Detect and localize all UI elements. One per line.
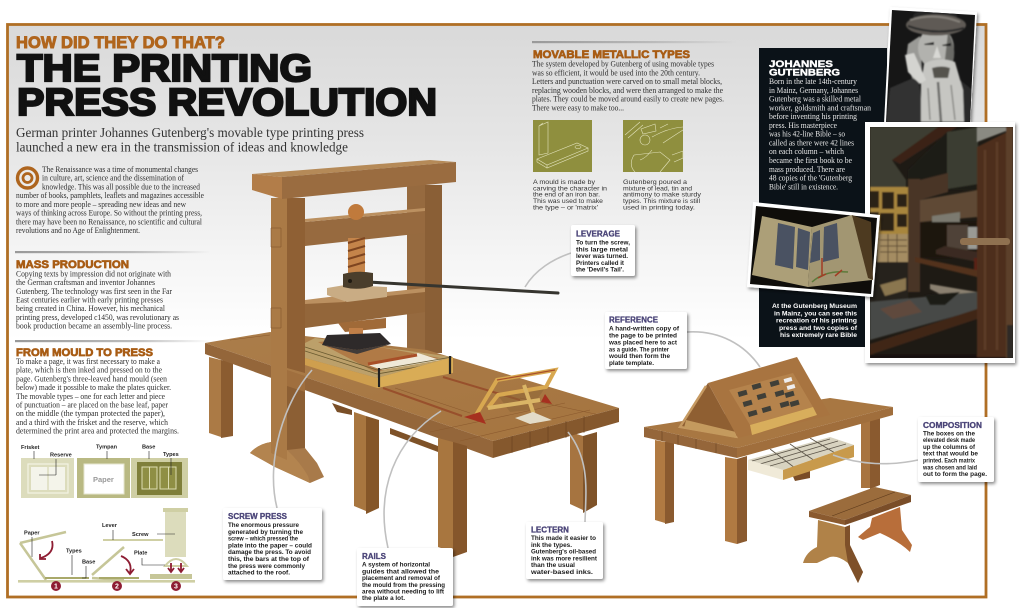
illustration: compositor desk xyxy=(644,357,912,583)
callout: composition: COMPOSITION xyxy=(923,420,982,430)
text: movable metallic types: was so efficient, it would be used into the 20th century. xyxy=(532,68,700,77)
diagram: press steps: 1 xyxy=(54,584,58,590)
intro text block xyxy=(16,165,204,235)
photo: museum recreation of press xyxy=(865,122,1015,363)
labels: mould diagram: Frisket xyxy=(21,445,39,451)
intro text block: number of books, pamphlets, leaflets and magazines accessible xyxy=(16,191,204,200)
text: mass production: Copying texts by impression did not originate with xyxy=(16,269,172,278)
bench xyxy=(803,487,912,583)
callout: leverage: To turn the screw, xyxy=(576,240,630,247)
callout: lectern: This made it easier to xyxy=(531,535,596,542)
diagram: press steps xyxy=(18,508,195,591)
desk legs xyxy=(655,418,880,524)
text: biography: press. His masterpiece xyxy=(769,121,837,130)
text: movable metallic types xyxy=(532,60,724,112)
captions: mould and pour: antimony to make sturdy xyxy=(623,192,702,199)
front left post with foot xyxy=(250,198,324,483)
diagram: press steps: 3 xyxy=(174,584,178,590)
callout: reference: plate template. xyxy=(609,360,654,367)
kicker heading: HOW DID THEY DO THAT? xyxy=(16,34,225,52)
callout: composition: elevated desk made xyxy=(923,437,975,444)
callout: screw press: this, the bars at the top of xyxy=(228,556,310,563)
diagram: three-leaved hand mould xyxy=(21,451,188,498)
text: biography: on each column – which xyxy=(769,147,845,156)
captions: mould and pour: used in printing today. xyxy=(623,204,695,211)
text: biography xyxy=(769,77,872,191)
text: from mould to press: The movable types – one for each letter and piece xyxy=(16,392,165,401)
callout: screw press: The enormous pressure xyxy=(228,522,299,529)
callout: screw press: damage the press. To avoid xyxy=(228,549,311,556)
title: THE PRINTING xyxy=(17,48,312,90)
text: biography: mass produced. There are xyxy=(769,165,845,174)
title xyxy=(17,48,437,124)
back right post xyxy=(407,185,442,353)
heading: Johannes Gutenberg xyxy=(769,59,840,78)
text: mass production xyxy=(16,269,179,331)
callout: rails: the plate a lot. xyxy=(362,595,405,602)
labels: mould diagram: Reserve xyxy=(50,452,72,458)
text: biography: Born in the late 14th-century xyxy=(769,77,858,86)
callout: composition: The boxes on the xyxy=(923,430,975,437)
heading: Johannes Gutenberg: GUTENBERG xyxy=(769,68,840,78)
caption: museum: his extremely rare Bible xyxy=(780,332,858,339)
elevated slanted desk xyxy=(678,357,830,438)
callout: screw press: the press were commonly xyxy=(228,563,305,570)
caption: museum: press and two copies of xyxy=(779,325,858,332)
text: movable metallic types: plates. They could be moved around easily to create new pages. xyxy=(532,95,724,104)
text: biography: called as there were 42 lines xyxy=(769,138,854,148)
mould on table xyxy=(305,338,453,388)
intro text block: there may have been no Renaissance, no scientific and cultural xyxy=(16,217,203,226)
caption: museum xyxy=(772,303,858,339)
labels: mould diagram: Tympan xyxy=(96,444,118,450)
text: mass production: being created in China. However, his mechanical xyxy=(16,304,166,313)
intro text block: in culture, art, science and the dissemination of xyxy=(42,174,184,183)
text: from mould to press: page. Gutenberg's three-leaved hand mould (seen xyxy=(16,374,168,383)
captions: mould and pour: Gutenberg poured a xyxy=(623,179,687,186)
text: movable metallic types: The system developed by Gutenberg of using movable types xyxy=(532,60,714,69)
text: from mould to press: on the middle (the tympan protected the paper), xyxy=(16,409,165,418)
labels: mould diagram xyxy=(21,444,179,458)
captions: mould and pour: mixture of lead, tin and xyxy=(623,185,692,192)
leader lines xyxy=(273,253,918,548)
text: biography: in Mainz, Germany, Johannes xyxy=(769,86,858,95)
callout: composition xyxy=(918,417,994,482)
photo: open Gutenberg Bible xyxy=(747,202,880,297)
labels: press steps xyxy=(24,523,149,566)
callout: rails: area without needing to lift xyxy=(362,588,445,596)
lower crossbar xyxy=(305,288,425,328)
text: from mould to press: To make a page, it was first necessary to make a xyxy=(16,357,160,366)
caption: museum: At the Gutenberg Museum xyxy=(772,303,857,310)
callout: composition: was chosen and laid xyxy=(922,464,977,471)
intro text block: to more and more people – spreading new ideas and new xyxy=(16,200,186,209)
rails xyxy=(383,377,520,416)
text: from mould to press: determined the print area and protected the margins. xyxy=(16,427,179,436)
callout: screw press: SCREW PRESS xyxy=(228,511,287,521)
text: mass production: printing press, developed c1450, was revolutionary as xyxy=(16,313,179,322)
text: biography: Bible' still in existence. xyxy=(769,182,838,191)
title: PRESS REVOLUTION xyxy=(17,82,437,124)
labels: press steps: Types xyxy=(66,548,82,554)
illustration: mould and matrix xyxy=(533,120,592,172)
callout: leverage: the 'Devil's Tail'. xyxy=(576,267,624,274)
labels: press steps: Screw xyxy=(132,532,149,538)
callout: composition: text that would be xyxy=(923,451,978,458)
callout: rails: A system of horizontal xyxy=(362,562,430,569)
callout: composition: out to form the page. xyxy=(923,471,987,478)
callout: lectern: ink was more resilient xyxy=(531,555,598,562)
caption: museum: in Mainz, you can see this xyxy=(774,310,858,317)
heading: movable metallic types: MOVABLE METALLIC TYPES xyxy=(533,49,690,61)
heading: mass production: MASS PRODUCTION xyxy=(16,259,129,271)
front desk leg xyxy=(725,456,747,544)
callout: rails: RAILS xyxy=(362,551,386,561)
callout: lectern xyxy=(526,522,603,579)
callout: screw press: generated by turning the xyxy=(228,529,303,536)
subtitle xyxy=(16,125,364,154)
text: from mould to press: below) made it possible to make the plates quicker. xyxy=(16,383,171,392)
text: mass production: the German craftsman and inventor Johannes xyxy=(16,278,155,287)
text: biography: worker, goldsmith and craftsman xyxy=(769,103,872,112)
callout: rails xyxy=(357,548,453,606)
callout: composition: printed. Each matrix xyxy=(923,458,975,464)
callout: leverage xyxy=(571,225,635,276)
intro text block: revolutions and no Age of Enlightenment. xyxy=(16,226,140,235)
callout: screw press: attached to the roof. xyxy=(228,570,290,577)
type drawer xyxy=(748,437,854,481)
callout: lectern: ink the types. xyxy=(531,542,572,549)
text: mass production: East centuries earlier with early printing presses xyxy=(16,296,163,304)
callout: lectern: LECTERN xyxy=(531,525,569,535)
labels: mould diagram: Types xyxy=(163,452,179,458)
icon: target bullet xyxy=(18,168,38,188)
callout: lectern: water-based inks. xyxy=(530,569,593,576)
text: from mould to press xyxy=(16,357,179,436)
text: from mould to press: and a third with the frisket and the reserve, which xyxy=(16,418,169,427)
callout: leverage: LEVERAGE xyxy=(576,229,620,239)
portrait of Gutenberg xyxy=(884,7,977,126)
text: movable metallic types: There were easy to make too... xyxy=(532,103,624,112)
lectern xyxy=(464,370,555,424)
top beam xyxy=(252,160,456,199)
subtitle: German printer Johannes Gutenberg's movable type printing press xyxy=(16,125,364,140)
callout: screw press xyxy=(223,508,322,580)
intro text block: knowledge. This was all possible due to the increased xyxy=(42,182,201,191)
callout: lectern: Gutenberg's oil-based xyxy=(531,549,596,556)
captions: mould and pour: the type – or 'matrix' xyxy=(533,204,598,211)
screw xyxy=(348,204,365,273)
callout: rails: the mould from the pressing xyxy=(362,582,445,589)
diagram: press steps: 2 xyxy=(115,584,119,590)
callout: reference: A hand-written copy of xyxy=(609,326,680,333)
upper crossbar xyxy=(305,208,425,246)
text: movable metallic types: Letters and punctuation were carved on to small metal blocks, xyxy=(532,77,722,86)
callout: lectern: than the usual xyxy=(531,562,575,569)
text: biography: was his 42-line Bible – so xyxy=(769,130,845,139)
subtitle: launched a new era in the transmission of ideas and knowledge xyxy=(16,140,348,154)
callout: reference: as a guide. The printer xyxy=(609,346,669,353)
text: movable metallic types: replacing wooden blocks, and were then arranged to make the xyxy=(532,86,723,95)
labels: press steps: Paper xyxy=(24,530,40,536)
callout: screw press: screw – which pressed the xyxy=(228,536,298,543)
callout: leverage: lever was turned. xyxy=(576,253,628,260)
callout: reference: REFERENCE xyxy=(609,315,658,325)
table legs and under-supports xyxy=(209,357,597,514)
panel: Gutenberg biography dark box xyxy=(759,48,887,347)
platen xyxy=(322,333,391,354)
heading: from mould to press: FROM MOULD TO PRESS xyxy=(16,347,153,359)
callout: rails: guides that allowed the xyxy=(362,568,439,575)
callout: leverage: Printers called it xyxy=(576,260,625,267)
desk top xyxy=(644,398,893,458)
captions: mould and pour: the end of an iron bar. xyxy=(533,192,600,199)
text: biography: before inventing his printing xyxy=(769,112,857,121)
labels: press steps: Lever xyxy=(102,523,118,529)
text: biography: became the first book to be xyxy=(769,156,852,165)
table edge across post xyxy=(287,370,305,392)
labels: press steps: Base xyxy=(82,560,95,566)
caption: museum: recreation of his printing xyxy=(776,318,857,324)
text: biography: Gutenberg was a skilled metal xyxy=(769,95,862,104)
text: from mould to press: plate, which is then inked and pressed on to the xyxy=(16,366,162,375)
front table leg xyxy=(438,438,467,557)
diagram: three-leaved hand mould: Paper xyxy=(93,475,114,484)
intro text block: ways of thinking across Europe. So without the printing press, xyxy=(16,209,202,218)
text: mass production: Gutenberg. The technology was first seen in the Far xyxy=(16,287,172,296)
callout: reference: the page to be printed xyxy=(609,333,677,340)
captions: mould and pour xyxy=(533,179,702,211)
illustration: pouring type xyxy=(623,120,683,172)
callout: reference: would then form the xyxy=(608,353,670,360)
callout: reference: was placed here to act xyxy=(608,339,678,346)
text: biography: 48 copies of the 'Gutenberg xyxy=(769,174,852,183)
lever xyxy=(368,282,558,293)
captions: mould and pour: A mould is made by xyxy=(533,179,596,186)
screw collar and block xyxy=(327,272,387,337)
callout: reference xyxy=(605,312,687,369)
callout: screw press: plate into the paper – could xyxy=(228,542,312,549)
callout: leverage: this large metal xyxy=(576,246,628,253)
callout: rails: placement and removal of xyxy=(362,575,441,582)
intro text block: The Renaissance was a time of monumental changes xyxy=(42,165,198,174)
callout: composition: up the columns of xyxy=(923,444,976,451)
captions: mould and pour: This was used to make xyxy=(533,198,603,205)
illustration: printing press and table xyxy=(205,160,619,557)
text: from mould to press: of punctuation – are placed on the base leaf, paper xyxy=(16,400,168,410)
captions: mould and pour: types. This mixture is still xyxy=(623,198,701,205)
table top xyxy=(205,332,619,458)
heading: Johannes Gutenberg: JOHANNES xyxy=(769,59,833,70)
labels: mould diagram: Base xyxy=(142,444,155,450)
labels: press steps: Plate xyxy=(134,550,147,556)
text: mass production: book production became an assembly-line process. xyxy=(16,322,172,331)
captions: mould and pour: carving the character in xyxy=(533,185,607,192)
